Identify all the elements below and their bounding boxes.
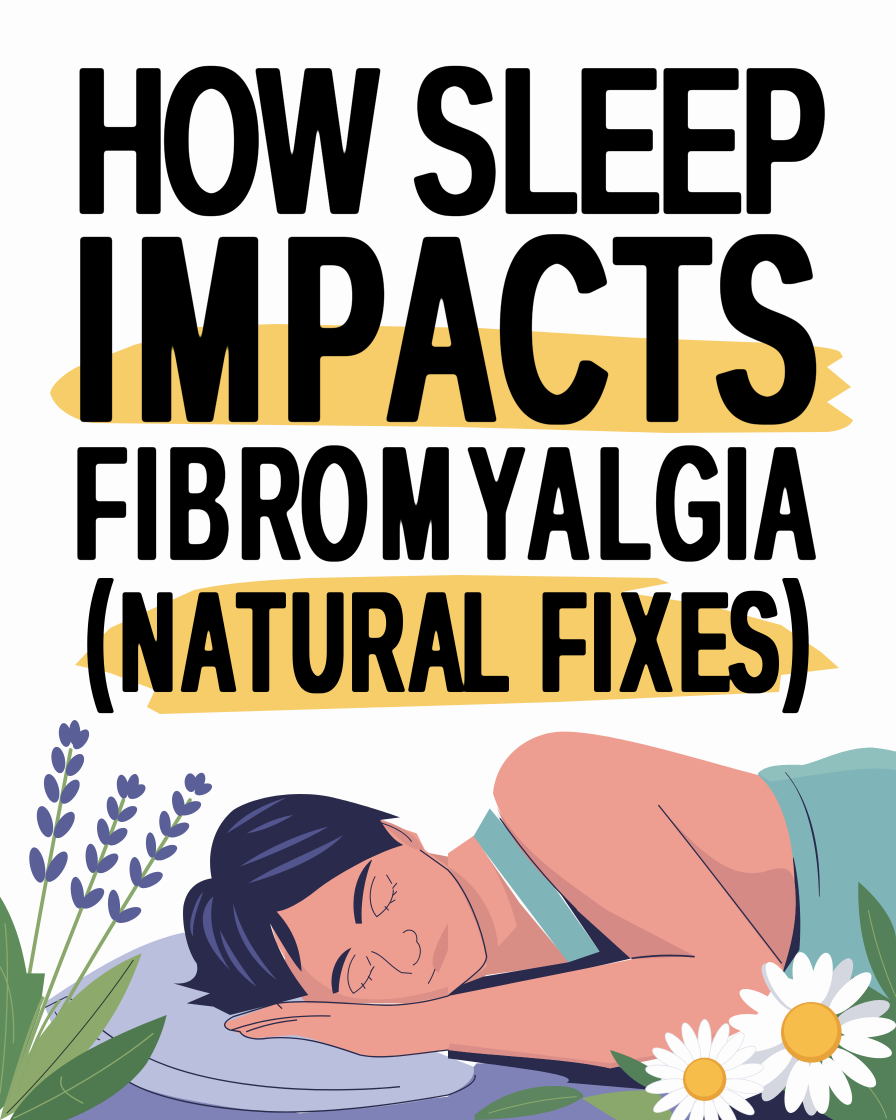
daisy petals (644, 1019, 765, 1120)
daisy petals (727, 951, 896, 1116)
lavender stems (7, 750, 190, 1110)
hand (225, 996, 448, 1057)
leaves lower right (475, 882, 896, 1120)
shirt collar (473, 808, 600, 962)
body shadow (448, 1048, 653, 1090)
navy sliver beside the arm (783, 857, 800, 973)
blanket highlight and fold (758, 748, 896, 897)
face (267, 818, 487, 1003)
lips shade (433, 923, 448, 973)
daisy: small (644, 1019, 765, 1120)
hair (173, 783, 403, 1015)
sage leaves lower left (0, 897, 167, 1120)
illustration: sleeping person with lavender and daisies (0, 720, 896, 1120)
dark band under arm (448, 813, 632, 1000)
lavender buds (26, 720, 214, 926)
blanket (758, 748, 896, 1010)
eyes, eyebrows and nose (332, 860, 445, 993)
bed sheet (67, 1063, 700, 1120)
lavender sprigs (7, 720, 214, 1110)
title line: (NATURAL FIXES): (NATURAL FIXES) (86, 554, 809, 723)
highlight: yellow brush behind NATURAL FIXES (75, 575, 839, 714)
title line: IMPACTS: IMPACTS (75, 177, 817, 481)
neck highlight (448, 836, 517, 947)
daisy centre (781, 1002, 842, 1063)
title line: FIBROMYALGIA: FIBROMYALGIA (75, 411, 816, 597)
daisy centre (683, 1058, 726, 1101)
title (74, 22, 826, 723)
arm shading (448, 805, 796, 1068)
highlight: yellow brush behind IMPACTS (50, 324, 853, 433)
pillow (43, 933, 475, 1112)
title line: HOW SLEEP: HOW SLEEP (74, 22, 826, 261)
daisy: large (727, 951, 896, 1116)
arm and shoulder (223, 732, 796, 1068)
neck and chest (367, 836, 570, 1003)
